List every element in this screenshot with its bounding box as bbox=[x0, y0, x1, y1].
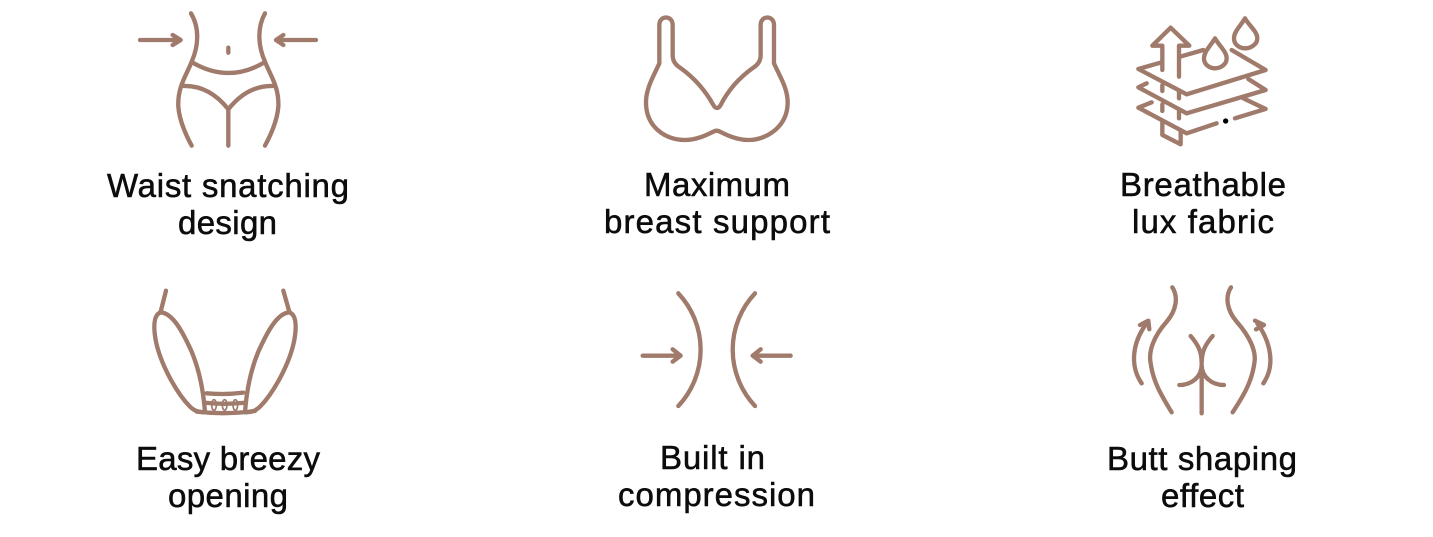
label: breathable lux fabric: lux fabric bbox=[1132, 203, 1274, 240]
label: easy breezy opening: opening bbox=[168, 477, 288, 514]
label: butt shaping effect bbox=[1107, 440, 1297, 514]
label: waist snatching design bbox=[107, 167, 349, 241]
label: built in compression: Built in bbox=[660, 439, 765, 476]
label: easy breezy opening: Easy breezy bbox=[136, 440, 320, 477]
label: waist snatching design: design bbox=[178, 204, 277, 241]
label: butt shaping effect: Butt shaping bbox=[1107, 440, 1297, 477]
icon: breathable fabric layers bbox=[1138, 18, 1266, 144]
icon: butt shaping bbox=[1134, 287, 1270, 413]
icon: easy opening back bbox=[154, 291, 296, 413]
label: maximum breast support: Maximum bbox=[644, 166, 790, 203]
icon: compression bbox=[643, 293, 791, 406]
label: breathable lux fabric: Breathable bbox=[1120, 166, 1286, 203]
label: butt shaping effect: effect bbox=[1161, 477, 1244, 514]
label: maximum breast support bbox=[604, 166, 830, 240]
label: waist snatching design: Waist snatching bbox=[107, 167, 349, 204]
label: built in compression bbox=[618, 439, 815, 513]
icon: waist snatching bbox=[140, 13, 316, 146]
label: easy breezy opening bbox=[136, 440, 320, 514]
icon: bra bbox=[646, 17, 788, 140]
label: built in compression: compression bbox=[618, 476, 815, 513]
label: breathable lux fabric bbox=[1120, 166, 1286, 240]
label: maximum breast support: breast support bbox=[604, 203, 830, 240]
